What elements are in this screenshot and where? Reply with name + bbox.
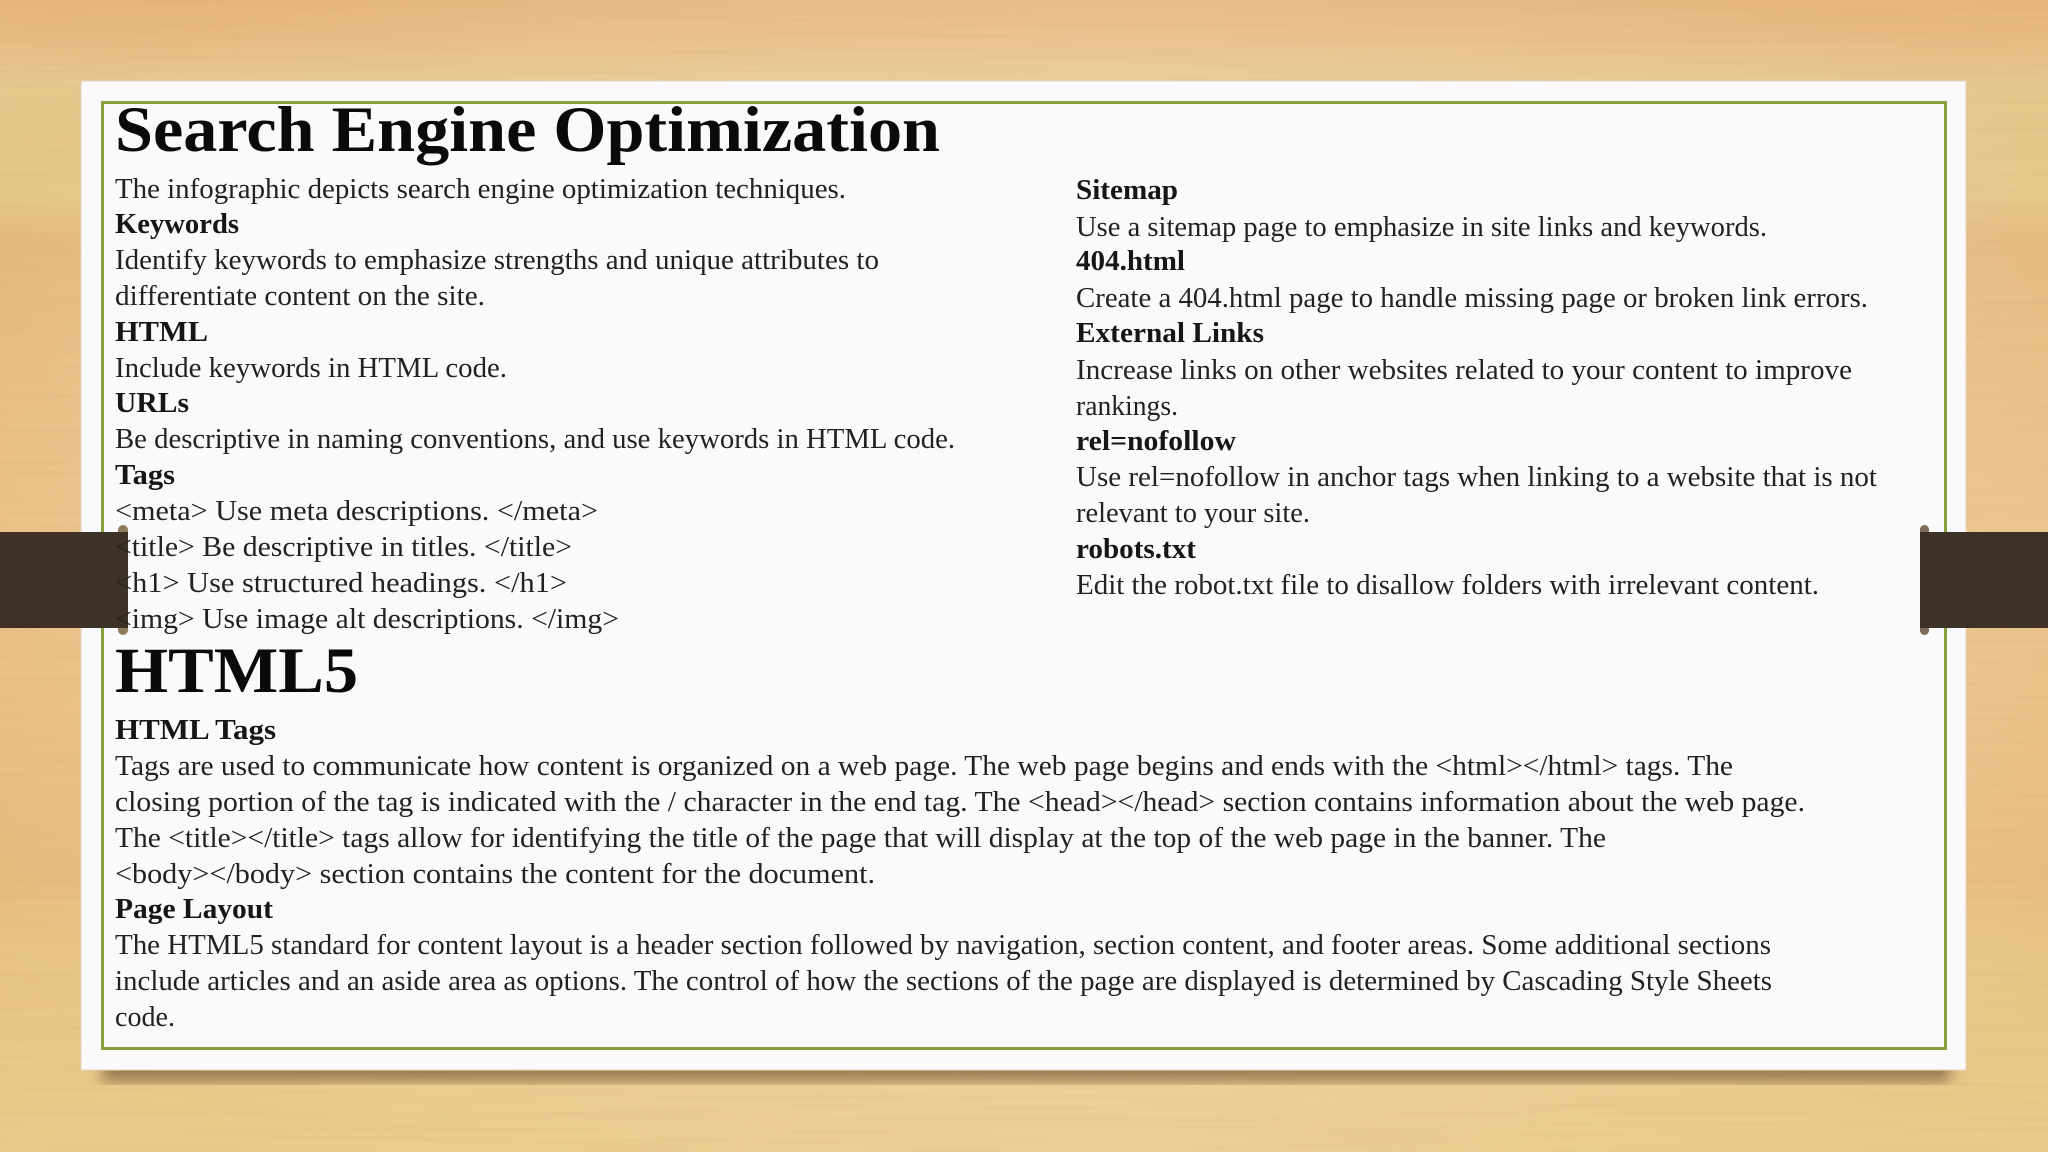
right column: seo techniques continued: rankings.	[1076, 391, 1178, 422]
heading: html5: HTML5	[115, 635, 358, 707]
left column: seo techniques: differentiate content on the site.	[115, 281, 485, 312]
left column: seo techniques: <title> Be descriptive in titles. </title>	[115, 532, 572, 563]
html5 body text: <body></body> section contains the content for the document.	[115, 859, 875, 890]
right column: seo techniques continued: Sitemap	[1076, 175, 1178, 206]
html5 body text: closing portion of the tag is indicated with the / character in the end tag. The <head></head> section contains information about the web page.	[115, 787, 1805, 818]
left column: seo techniques: Include keywords in HTML code.	[115, 353, 507, 384]
right column: seo techniques continued: relevant to your site.	[1076, 498, 1310, 529]
html5 body text: code.	[115, 1002, 175, 1033]
html5 body text: Page Layout	[115, 894, 274, 925]
html5 body text: The <title></title> tags allow for identifying the title of the page that will display at the top of the web page in the banner. The	[115, 823, 1606, 854]
html5 body text: HTML Tags	[115, 715, 276, 746]
left column: seo techniques: <meta> Use meta descriptions. </meta>	[115, 496, 598, 527]
left column: seo techniques: <h1> Use structured headings. </h1>	[115, 568, 567, 599]
left column: seo techniques: The infographic depicts search engine optimization techniques.	[115, 174, 846, 205]
html5 body text: include articles and an aside area as options. The control of how the sections of the page are displayed is determined by Cascading Style Sheets	[115, 966, 1772, 997]
right column: seo techniques continued: Edit the robot.txt file to disallow folders with irrelevant content.	[1076, 570, 1819, 601]
left column: seo techniques: HTML	[115, 317, 208, 348]
left column: seo techniques: URLs	[115, 388, 189, 419]
left column: seo techniques: Keywords	[115, 209, 239, 240]
title: search engine optimization: Search Engine Optimization	[115, 94, 940, 166]
left column: seo techniques	[115, 174, 955, 635]
right column: seo techniques continued: External Links	[1076, 318, 1264, 349]
left strap	[0, 525, 128, 635]
html5 body text: Tags are used to communicate how content is organized on a web page. The web page begins and ends with the <html></html> tags. The	[115, 751, 1733, 782]
right column: seo techniques continued: Use a sitemap page to emphasize in site links and keywords.	[1076, 212, 1767, 243]
card drop shadow	[102, 1052, 1950, 1082]
right column: seo techniques continued: Use rel=nofollow in anchor tags when linking to a website that is not	[1076, 462, 1877, 493]
right column: seo techniques continued: Increase links on other websites related to your content to improve	[1076, 355, 1852, 386]
green inner frame	[102, 102, 1946, 1048]
right column: seo techniques continued: rel=nofollow	[1076, 426, 1237, 457]
right column: seo techniques continued: robots.txt	[1076, 534, 1197, 565]
left column: seo techniques: Tags	[115, 460, 175, 491]
right strap	[1920, 525, 2048, 635]
right column: seo techniques continued: 404.html	[1076, 246, 1185, 277]
right column: seo techniques continued: Create a 404.html page to handle missing page or broken link errors.	[1076, 283, 1868, 314]
paper card	[81, 81, 1966, 1070]
html5 body text: The HTML5 standard for content layout is a header section followed by navigation, section content, and footer areas. Some additional sections	[115, 930, 1771, 961]
right column: seo techniques continued	[1076, 175, 1877, 601]
left column: seo techniques: <img> Use image alt descriptions. </img>	[115, 604, 619, 635]
left column: seo techniques: Identify keywords to emphasize strengths and unique attributes to	[115, 245, 879, 276]
html5 body text	[115, 715, 1805, 1033]
left column: seo techniques: Be descriptive in naming conventions, and use keywords in HTML code.	[115, 424, 955, 455]
